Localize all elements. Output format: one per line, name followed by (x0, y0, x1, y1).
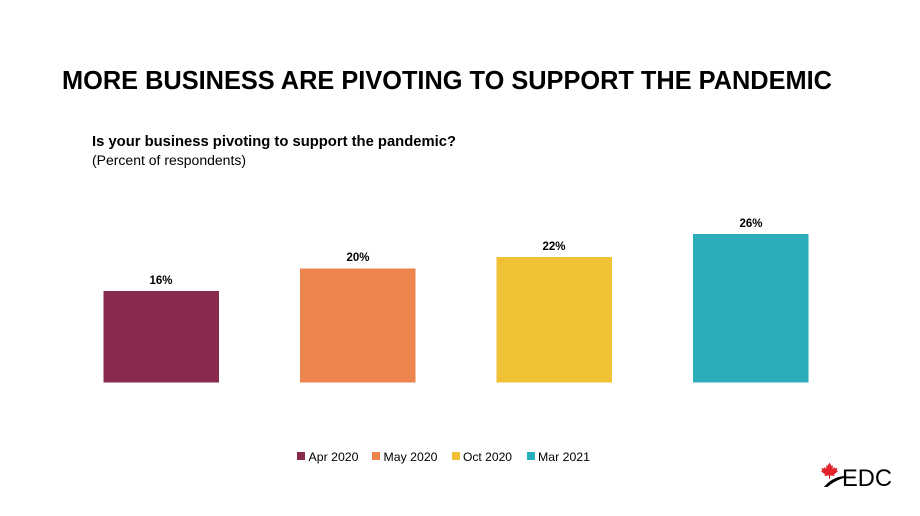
legend: Oct 2020 (463, 450, 512, 464)
subtitle: (Percent of respondents) (92, 153, 246, 168)
legend (297, 450, 590, 464)
chart heading (92, 134, 456, 168)
question: Is your business pivoting to support the pandemic? (92, 134, 456, 150)
bar: Mar 2021: 26% (740, 218, 762, 230)
bar: May 2020: 20% (346, 252, 370, 264)
bar chart (104, 218, 808, 382)
swoosh (824, 476, 844, 487)
bar: Oct 2020 (496, 241, 612, 382)
legend: May 2020 (384, 450, 438, 464)
wordmark: EDC (842, 465, 892, 492)
bar: May 2020 (300, 252, 416, 382)
bar: Apr 2020: 16% (150, 275, 172, 287)
bar: Oct 2020: 22% (542, 241, 566, 253)
legend: Mar 2021 (538, 450, 590, 464)
title: MORE BUSINESS ARE PIVOTING TO SUPPORT THE PANDEMIC (62, 65, 832, 95)
legend: Apr 2020 (308, 450, 359, 464)
icon: maple leaf (821, 462, 838, 479)
bar: Mar 2021 (693, 218, 808, 382)
icon: EDC logo (821, 462, 892, 492)
bar: Apr 2020 (104, 275, 219, 382)
